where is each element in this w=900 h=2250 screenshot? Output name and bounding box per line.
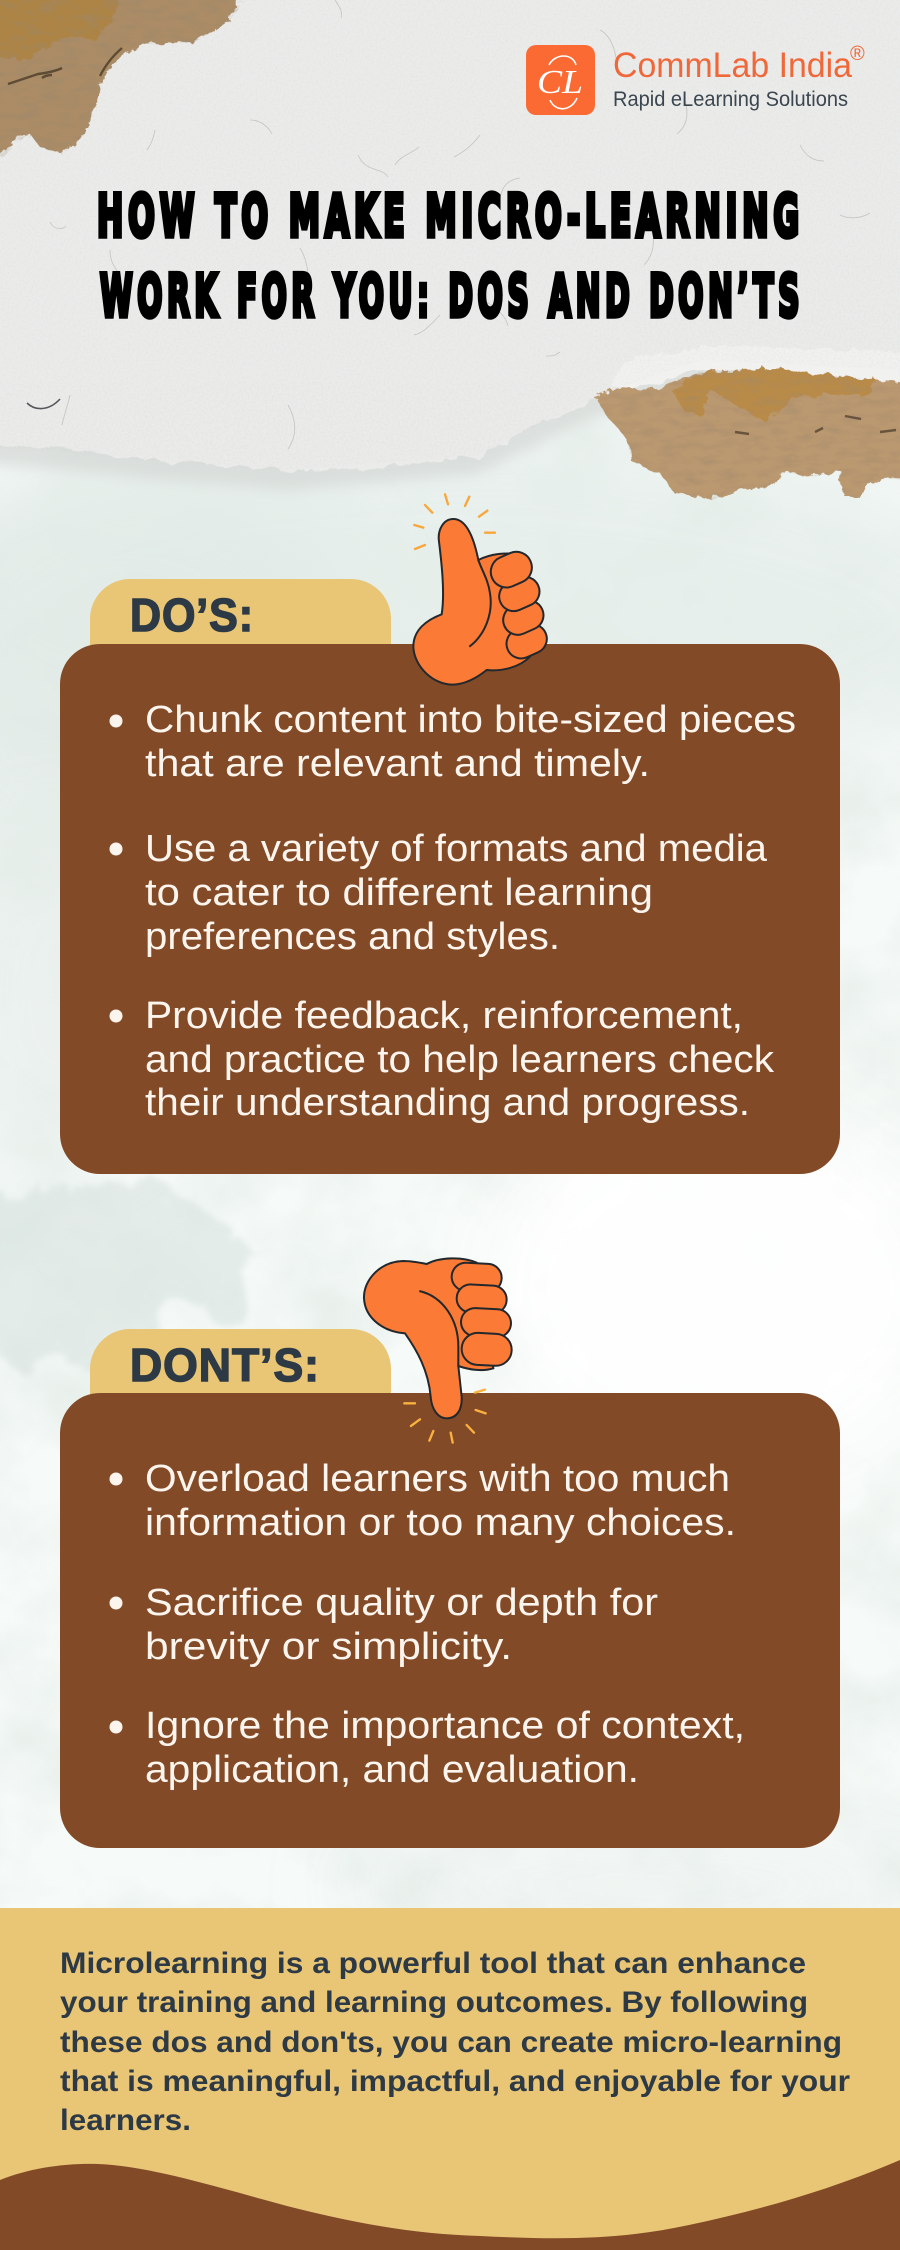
card: do's list: to cater to different learning — [145, 872, 653, 914]
conclusion text: your training and learning outcomes. By following — [60, 1986, 808, 2019]
panel: conclusion band — [0, 1908, 900, 2250]
tab: do's heading — [90, 579, 391, 660]
conclusion text: that is meaningful, impactful, and enjoyable for your — [60, 2065, 850, 2098]
logo mark: CL — [537, 64, 583, 101]
logo name: CommLab India — [613, 46, 853, 85]
icon: thumbs down — [364, 1258, 512, 1443]
panel: do's — [60, 494, 840, 1174]
tab: don'ts heading: DONT’S: — [130, 1339, 320, 1391]
registered mark: ® — [850, 43, 865, 65]
conclusion text: these dos and don'ts, you can create micro-learning — [60, 2026, 842, 2059]
card: do's list — [60, 644, 840, 1174]
conclusion text — [60, 1947, 850, 2137]
card: do's list: their understanding and progress. — [145, 1082, 750, 1124]
card: do's list: Provide feedback, reinforcement, — [145, 995, 743, 1037]
logo: CommLab India — [526, 43, 865, 115]
card: do's list: preferences and styles. — [145, 916, 560, 958]
icon: thumbs up — [413, 494, 552, 685]
card: do's list: that are relevant and timely. — [145, 743, 650, 785]
tab: don'ts heading — [90, 1329, 391, 1410]
card: don'ts list: brevity or simplicity. — [145, 1626, 512, 1668]
panel: torn paper header — [0, 0, 900, 490]
paper fibres — [50, 0, 870, 449]
card: don'ts list: Sacrifice quality or depth for — [145, 1582, 658, 1624]
conclusion text: learners. — [60, 2104, 191, 2137]
logo mark — [526, 45, 595, 115]
card: don'ts list — [60, 1393, 840, 1848]
card: do's list: Use a variety of formats and media — [145, 828, 768, 870]
card: don'ts list: Overload learners with too much — [145, 1458, 730, 1500]
brown wave footer — [0, 2160, 900, 2250]
title — [97, 182, 804, 330]
panel: cardboard top left — [0, 0, 250, 165]
card: don'ts list: application, and evaluation. — [145, 1749, 639, 1791]
panel: don'ts — [60, 1258, 840, 1848]
tab: do's heading: DO’S: — [130, 589, 254, 641]
logo tagline: Rapid eLearning Solutions — [613, 88, 848, 111]
card: don'ts list: Ignore the importance of context, — [145, 1705, 745, 1747]
card: do's list: Chunk content into bite-sized pieces — [145, 699, 796, 741]
card: don'ts list: information or too many choices. — [145, 1502, 736, 1544]
panel: cardboard right — [590, 360, 900, 505]
card: do's list: and practice to help learners check — [145, 1039, 775, 1081]
conclusion text: Microlearning is a powerful tool that can enhance — [60, 1947, 806, 1980]
